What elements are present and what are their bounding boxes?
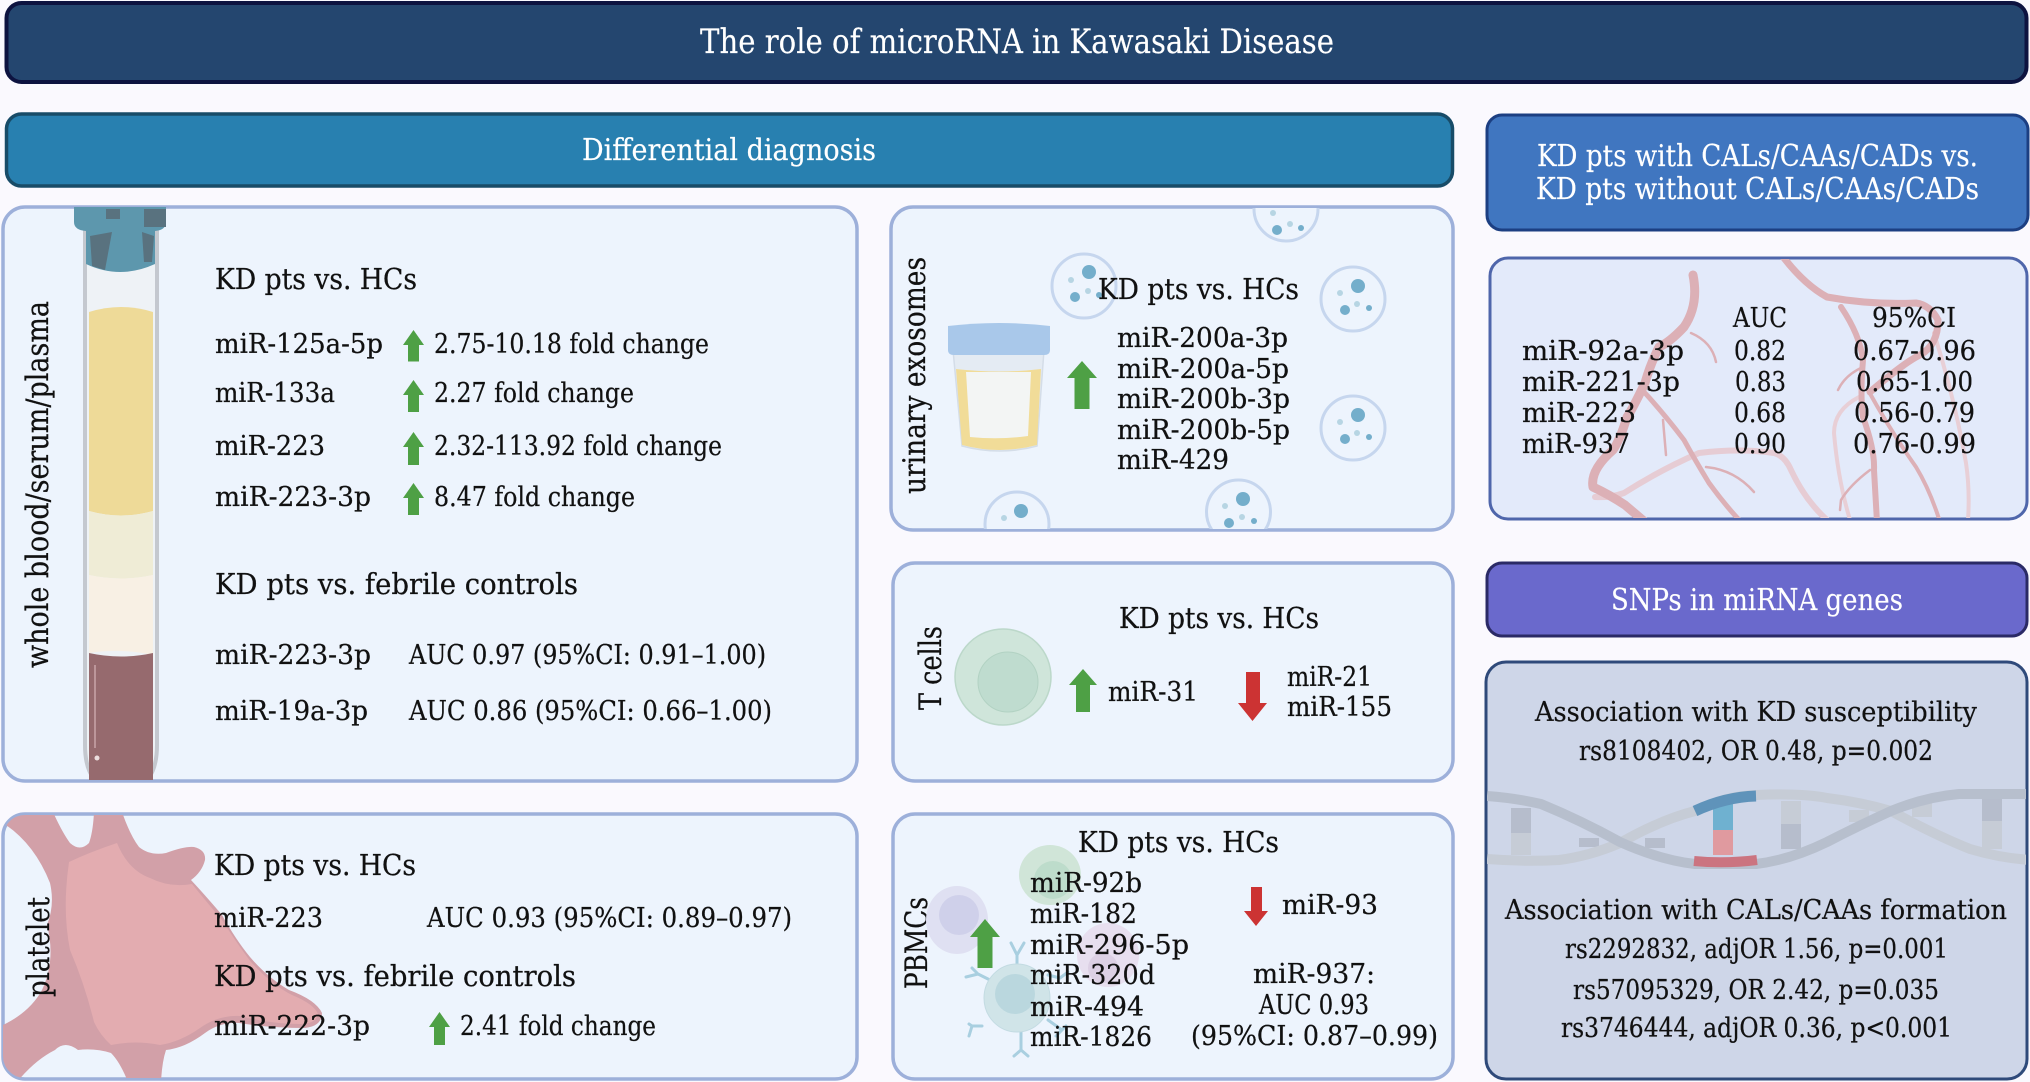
- table header: [1732, 303, 1956, 334]
- row: miR-223: [215, 431, 722, 465]
- miRNA list: miR-429: [1117, 445, 1229, 476]
- panel: whole blood/serum/plasma: [3, 205, 857, 790]
- section header: differential diagnosis: [6, 114, 1452, 186]
- miRNA list: miR-296-5p: [1030, 930, 1189, 961]
- table row: miR-223: 0.68: [1734, 398, 1786, 429]
- text block: miR-937 AUC: [1191, 959, 1438, 1052]
- icon: platelet cell: [3, 812, 322, 1082]
- row: miR-223-3p: [215, 482, 635, 515]
- row: miR-19a-3p AUC: AUC 0.86 (95%CI: 0.66–1.00): [408, 696, 772, 727]
- table row: miR-92a-3p: 0.82: [1734, 336, 1786, 367]
- miRNA list: miR-200a-3p: [1117, 323, 1288, 354]
- row: miR-223-3p: miR-223-3p: [215, 482, 371, 513]
- panel: SNP associations: [1486, 662, 2030, 1079]
- panel: AUC table: [1490, 258, 2027, 522]
- table row: miR-221-3p: 0.65-1.00: [1856, 367, 1973, 398]
- row: miR-223-3p AUC: miR-223-3p: [215, 640, 371, 671]
- table row: miR-937: 0.76-0.99: [1853, 429, 1976, 460]
- miRNA list: miR-21: [1287, 662, 1372, 693]
- text block: miR-937 AUC: miR-937:: [1253, 959, 1375, 990]
- label: miR-93: miR-93: [1282, 890, 1378, 921]
- miRNA list: miR-155: [1287, 692, 1392, 723]
- row: miR-222-3p: [214, 1011, 656, 1045]
- section header: KD pts with vs. without CALs: [1487, 115, 2028, 230]
- table row: miR-221-3p: miR-221-3p: [1522, 367, 1680, 398]
- title banner: [6, 3, 2026, 82]
- row: miR-133a: [215, 378, 634, 412]
- miRNA list: miR-494: [1030, 992, 1144, 1023]
- row: miR-133a: 2.27 fold change: [434, 378, 634, 409]
- heading: KD pts vs. HCs: KD pts vs. HCs: [215, 262, 417, 296]
- section header: differential diagnosis: Differential diagnosis: [582, 133, 876, 168]
- row: miR-133a: miR-133a: [215, 378, 335, 409]
- table row: miR-92a-3p: miR-92a-3p: [1522, 336, 1684, 367]
- vertical label: T cells: [913, 626, 949, 710]
- miRNA list: miR-200b-5p: [1117, 415, 1290, 446]
- vertical label: urinary exosomes: [897, 257, 933, 494]
- row: miR-222-3p: 2.41 fold change: [460, 1011, 656, 1042]
- miRNA list: miR-320d: [1030, 960, 1155, 991]
- panel: PBMCs: [893, 814, 1453, 1079]
- table row: miR-223: [1522, 398, 1975, 429]
- row: miR-223: miR-223: [215, 431, 325, 462]
- section header: KD pts with vs. without CALs: KD pts without CALs/CAAs/CADs: [1536, 172, 1979, 207]
- heading: KD pts vs. febrile controls: KD pts vs. febrile controls: [214, 959, 576, 993]
- row: miR-125a-5p: [215, 329, 709, 362]
- row: miR-223-3p AUC: AUC 0.97 (95%CI: 0.91–1.00): [408, 640, 766, 671]
- icon: urine cup: [948, 323, 1050, 451]
- row: miR-125a-5p: 2.75-10.18 fold change: [434, 329, 709, 360]
- icon: DNA helix: [1487, 794, 2030, 864]
- section header: KD pts with vs. without CALs: KD pts with CALs/CAAs/CADs vs.: [1537, 139, 1978, 174]
- arrow up: [1067, 361, 1097, 409]
- text block: miR-937 AUC: (95%CI: 0.87–0.99): [1191, 1021, 1438, 1052]
- arrow down: [1238, 672, 1267, 721]
- row: miR-125a-5p: miR-125a-5p: [215, 329, 383, 360]
- row: miR-223-3p AUC: [215, 640, 766, 671]
- miRNA list: [1287, 662, 1392, 723]
- icon: exosomes: [984, 208, 1386, 529]
- section header: SNPs in miRNA genes: [1487, 563, 2027, 636]
- row: miR-223 AUC: miR-223: [214, 903, 323, 934]
- miRNA list: miR-182: [1030, 899, 1137, 930]
- text block: miR-937 AUC: AUC 0.93: [1258, 990, 1369, 1021]
- icon: T cell: [955, 629, 1051, 725]
- miRNA list: miR-1826: [1030, 1022, 1152, 1053]
- table row: miR-92a-3p: 0.67-0.96: [1853, 336, 1976, 367]
- heading: CALs/CAAs formation: Association with CALs/CAAs formation: [1504, 895, 2007, 926]
- SNP: rs2292832: rs2292832, adjOR 1.56, p=0.001: [1565, 934, 1948, 965]
- panel: platelet: [3, 812, 857, 1082]
- row: miR-223: 2.32-113.92 fold change: [434, 431, 722, 462]
- icon: immune cells: [926, 845, 1139, 1056]
- row: miR-19a-3p AUC: miR-19a-3p: [215, 696, 368, 727]
- panel: urinary exosomes: [889, 205, 1455, 532]
- SNP: rs3746444: rs3746444, adjOR 0.36, p<0.001: [1561, 1013, 1952, 1044]
- miRNA list: [1030, 868, 1189, 1053]
- heading: KD pts vs. HCs: KD pts vs. HCs: [214, 848, 416, 882]
- section header: SNPs in miRNA genes: SNPs in miRNA genes: [1611, 583, 1903, 618]
- miRNA list: miR-200a-5p: [1117, 354, 1289, 385]
- title banner: The role of microRNA in Kawasaki Disease: [700, 22, 1334, 62]
- table row: miR-937: [1522, 429, 1976, 460]
- label: miR-31: miR-31: [1108, 677, 1198, 708]
- table row: miR-223: 0.56-0.79: [1854, 398, 1975, 429]
- miRNA list: miR-92b: [1030, 868, 1142, 899]
- row: miR-222-3p: miR-222-3p: [214, 1011, 370, 1042]
- icon: coronary vessels: [1593, 258, 1969, 522]
- heading: KD pts vs. febrile controls: KD pts vs. febrile controls: [215, 567, 578, 601]
- arrow up: [1069, 669, 1097, 712]
- row: miR-19a-3p AUC: [215, 696, 772, 727]
- table header: AUC: [1732, 303, 1787, 334]
- heading: KD pts vs. HCs: KD pts vs. HCs: [1119, 601, 1319, 635]
- table row: miR-221-3p: 0.83: [1735, 367, 1786, 398]
- SNP: rs8108402: rs8108402, OR 0.48, p=0.002: [1579, 736, 1933, 767]
- heading: KD susceptibility: Association with KD susceptibility: [1534, 697, 1978, 728]
- vertical label: PBMCs: [899, 897, 935, 989]
- panel: T cells: [893, 563, 1453, 781]
- vertical label: platelet: [21, 897, 57, 997]
- heading: KD pts vs. HCs: KD pts vs. HCs: [1098, 272, 1299, 306]
- table row: miR-937: miR-937: [1522, 429, 1630, 460]
- SNP: rs57095329: rs57095329, OR 2.42, p=0.035: [1573, 975, 1939, 1006]
- row: miR-223 AUC: AUC 0.93 (95%CI: 0.89–0.97): [426, 903, 792, 934]
- arrow down: [1244, 887, 1268, 926]
- miRNA list: miR-200b-3p: [1117, 384, 1290, 415]
- vertical label: whole blood/serum/plasma: [20, 301, 56, 668]
- table header: 95%CI: [1872, 303, 1956, 334]
- heading: KD pts vs. HCs: KD pts vs. HCs: [1078, 825, 1279, 859]
- table row: miR-937: 0.90: [1734, 429, 1786, 460]
- row: miR-223-3p: 8.47 fold change: [434, 482, 635, 513]
- table row: miR-223: miR-223: [1522, 398, 1636, 429]
- icon: blood collection tube: [74, 205, 166, 790]
- table row: miR-92a-3p: [1522, 336, 1976, 367]
- row: miR-223 AUC: [214, 903, 792, 934]
- miRNA list: [1117, 323, 1290, 476]
- arrow up: [970, 919, 1000, 968]
- table row: miR-221-3p: [1522, 367, 1973, 398]
